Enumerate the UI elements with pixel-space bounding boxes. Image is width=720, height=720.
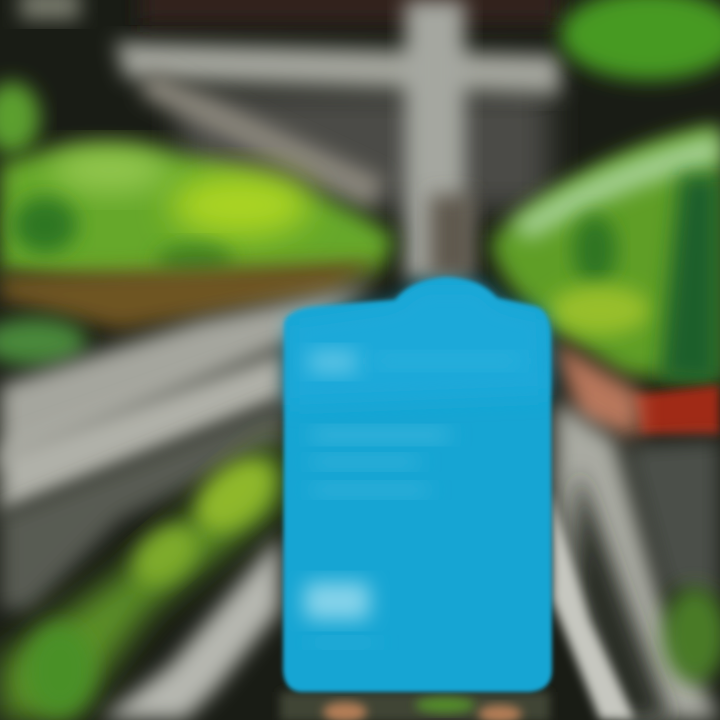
background photo: top ceiling pipes xyxy=(20,0,560,280)
large figure blur xyxy=(304,582,370,620)
body text line three blur xyxy=(310,484,430,496)
background photo: lower-left seedlings xyxy=(0,440,287,720)
body text line two blur xyxy=(310,456,420,468)
background photo: right plants xyxy=(490,0,720,440)
background photo: left lettuce bed xyxy=(0,82,395,366)
body text blur xyxy=(310,428,450,442)
card lighter top band xyxy=(290,285,548,405)
background photo: bottom strip below panel xyxy=(280,692,550,720)
background photo: left white pipes xyxy=(0,282,380,610)
background photo: right pipes and trays xyxy=(552,400,720,720)
small caption blur xyxy=(308,638,378,647)
panel: blue information card xyxy=(283,277,552,692)
heading text blur xyxy=(308,350,358,374)
heading second line blur xyxy=(372,354,522,368)
card shape xyxy=(283,277,552,692)
